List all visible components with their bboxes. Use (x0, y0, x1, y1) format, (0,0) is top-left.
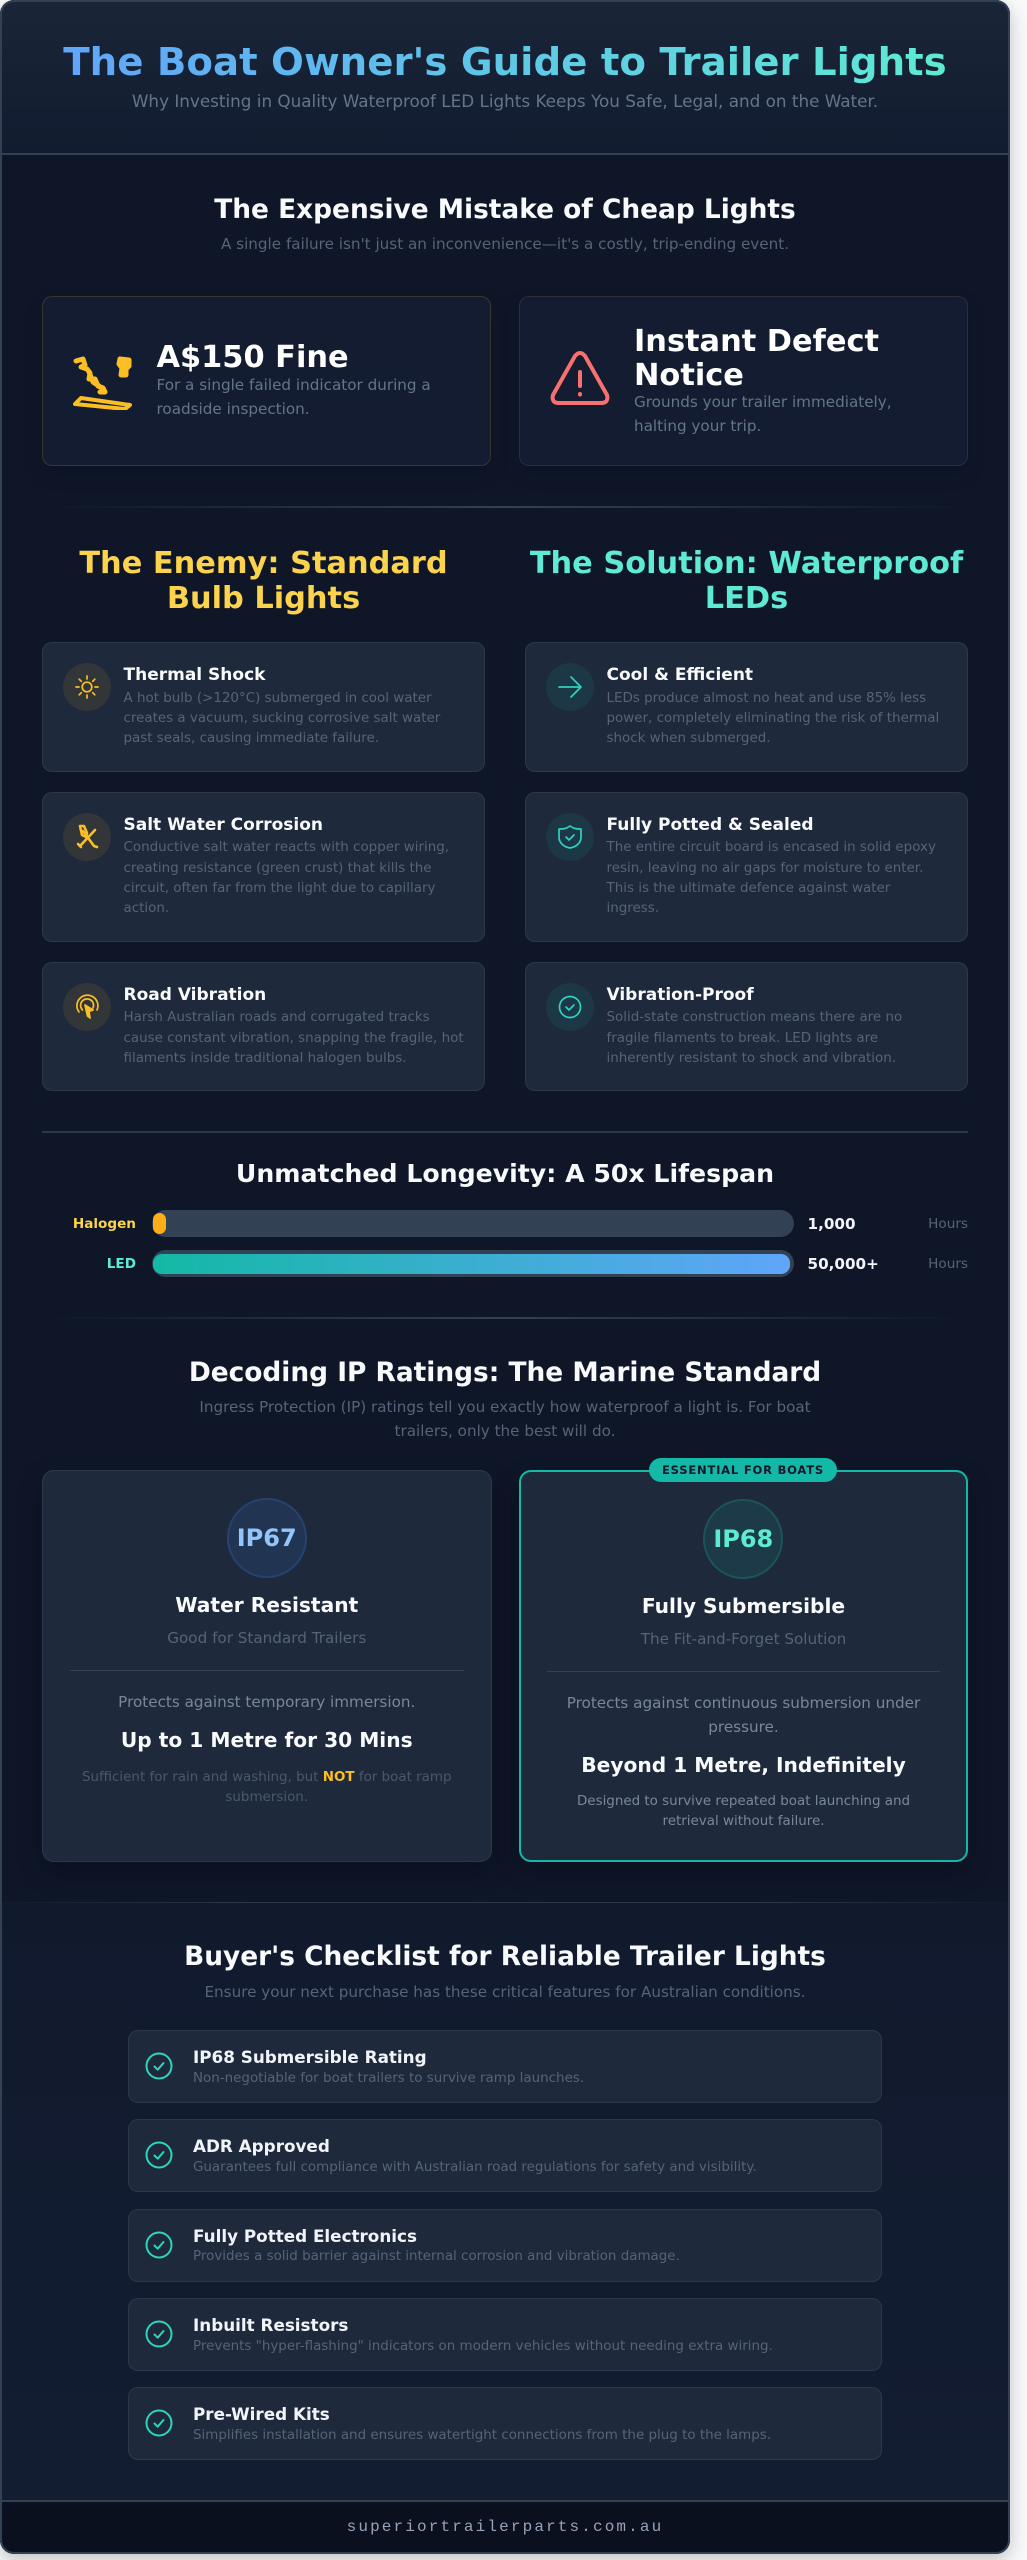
text: filaments inside traditional halogen bulbs. (124, 1051, 407, 1066)
item title: ADR Approved (193, 2136, 330, 2156)
header band (0, 0, 1010, 155)
LED bar (152, 1250, 794, 1277)
icon: check (146, 2410, 172, 2436)
heading: IP ratings: Decoding IP Ratings: The Marine Standard (189, 1357, 821, 1388)
text: resin, leaving no air gaps for moisture to enter. (606, 861, 923, 876)
note (82, 1770, 452, 1805)
icon: check (146, 2142, 172, 2168)
text: cause constant vibration, snapping the fragile, hot (124, 1031, 464, 1046)
icon: sun (63, 663, 111, 711)
text (606, 1010, 902, 1066)
panel: IP67 (42, 1470, 492, 1862)
note: Designed to survive repeated boat launching and (577, 1794, 910, 1809)
icon: check circle (546, 983, 594, 1031)
footer: superiortrailerparts.com.au (347, 2518, 663, 2536)
title: Vibration-Proof (606, 985, 754, 1005)
panel: defect notice (519, 296, 968, 466)
title: Cool & Efficient (606, 665, 753, 685)
badge: IP68 (703, 1498, 783, 1578)
checklist item: IP68 (128, 2030, 882, 2103)
title: Road Vibration (124, 985, 266, 1005)
badge: IP68: IP68 (713, 1524, 773, 1552)
heading: enemy: The Enemy: Standard (79, 546, 448, 581)
item text: Provides a solid barrier against internal corrosion and vibration damage. (193, 2249, 680, 2264)
icon: arrow (546, 663, 594, 711)
LED value: 50,000+ (808, 1255, 879, 1273)
notice figure: Notice (634, 358, 744, 393)
subheading: IP ratings: Ingress Protection (IP) ratings tell you exactly how waterproof a light is. For boat (199, 1398, 811, 1416)
notice description (634, 393, 892, 435)
item text: Prevents "hyper-flashing" indicators on modern vehicles without needing extra wiring. (193, 2339, 773, 2354)
icon: signal cursor (63, 983, 111, 1031)
description: Protects against temporary immersion. (118, 1693, 415, 1711)
text: creates a vacuum, sucking corrosive salt water (124, 711, 440, 726)
text (124, 1010, 464, 1066)
halogen value: 1,000 (808, 1215, 856, 1233)
text: action. (124, 901, 169, 916)
fine description (156, 376, 431, 418)
heading: enemy (79, 546, 448, 616)
text: Conductive salt water reacts with copper wiring, (124, 840, 449, 855)
heading: solution: LEDs (705, 580, 788, 616)
title: Thermal Shock (124, 665, 265, 685)
title: Water Resistant (175, 1593, 358, 1617)
depth rating: Up to 1 Metre for 30 Mins (121, 1728, 413, 1752)
icon: tools (63, 813, 111, 861)
halogen bar (152, 1210, 794, 1237)
icon: check (146, 2320, 172, 2348)
checklist item: potted electronics (128, 2209, 882, 2282)
ribbon: essential (649, 1458, 837, 1482)
description (567, 1694, 920, 1736)
bar chart: lifespan (73, 1210, 968, 1277)
checklist item: pre-wired (128, 2387, 882, 2460)
text: Solid-state construction means there are no (606, 1010, 902, 1025)
text: fragile filaments to break. LED lights are (606, 1031, 878, 1046)
text: inherently resistant to shock and vibration. (606, 1051, 896, 1066)
panel: salt water corrosion (42, 792, 485, 942)
description: pressure. (708, 1718, 779, 1736)
halogen unit: Hours (928, 1216, 968, 1232)
notice description: halting your trip. (634, 417, 761, 435)
text: Harsh Australian roads and corrugated tracks (124, 1010, 430, 1025)
subtitle: Good for Standard Trailers (167, 1629, 366, 1647)
text: This is the ultimate defence against water (606, 881, 890, 896)
text: ingress. (606, 901, 659, 916)
notice figure (634, 324, 879, 393)
panel: road vibration (42, 962, 485, 1091)
text (124, 691, 440, 746)
heading: solution: The Solution: Waterproof (530, 546, 963, 581)
LED label: LED (107, 1256, 136, 1272)
title: Fully Submersible (642, 1594, 845, 1618)
subheading: expensive mistake: A single failure isn't just an inconvenience—it's a costly, trip-ending event. (221, 235, 789, 253)
title: Salt Water Corrosion (124, 815, 323, 835)
description: Protects against continuous submersion under (567, 1694, 920, 1712)
item text: Guarantees full compliance with Australian road regulations for safety and visibility. (193, 2160, 757, 2175)
subtitle: Why Investing in Quality Waterproof LED Lights Keeps You Safe, Legal, and on the Water. (132, 91, 878, 111)
heading: longevity: Unmatched Longevity: A 50x Lifespan (236, 1159, 774, 1188)
panel: fully potted (525, 792, 968, 942)
panel: cool and efficient (525, 642, 968, 772)
item text: Non-negotiable for boat trailers to survive ramp launches. (193, 2071, 584, 2086)
panel: vibration proof (525, 962, 968, 1091)
note: retrieval without failure. (662, 1814, 824, 1829)
footer (0, 2500, 1010, 2554)
text: creating resistance (green crust) that kills the (124, 861, 432, 876)
item text: Simplifies installation and ensures watertight connections from the plug to the lamps. (193, 2428, 771, 2443)
text: shock when submerged. (606, 731, 771, 746)
subheading: IP ratings (199, 1398, 811, 1440)
fine description: For a single failed indicator during a (156, 376, 431, 394)
text (124, 840, 449, 916)
icon: warning triangle (550, 351, 610, 405)
text (606, 691, 939, 746)
halogen label: Halogen (73, 1216, 136, 1232)
heading: checklist: Buyer's Checklist for Reliable Trailer Lights (184, 1941, 826, 1972)
text: circuit, often far from the light due to capillary (124, 881, 435, 896)
heading: solution (530, 546, 964, 616)
LED unit: Hours (928, 1256, 968, 1272)
badge: IP67: IP67 (237, 1524, 297, 1552)
heading: expensive mistake: The Expensive Mistake of Cheap Lights (214, 194, 796, 225)
item title: Fully Potted Electronics (193, 2226, 417, 2246)
notice figure: Instant Defect (634, 324, 879, 359)
panel: IP68 (519, 1470, 968, 1862)
icon: shield check (546, 813, 594, 861)
note (577, 1794, 910, 1829)
ribbon: essential: ESSENTIAL FOR BOATS (662, 1463, 824, 1477)
item title: IP68 Submersible Rating (193, 2047, 427, 2067)
depth rating: Beyond 1 Metre, Indefinitely (581, 1753, 906, 1777)
icon: check (146, 2232, 172, 2258)
subtitle: The Fit-and-Forget Solution (641, 1630, 846, 1648)
text: LEDs produce almost no heat and use 85% less (606, 691, 926, 706)
fine figure: A$150 Fine (156, 340, 349, 375)
title: The Boat Owner's Guide to Trailer Lights (63, 40, 947, 85)
item title: Inbuilt Resistors (193, 2315, 348, 2335)
note: Sufficient for rain and washing, but NOT for boat ramp (82, 1770, 452, 1784)
subheading: checklist: Ensure your next purchase has these critical features for Australian conditions. (204, 1983, 806, 2001)
text: A hot bulb (>120°C) submerged in cool water (124, 691, 432, 706)
panel: thermal shock (42, 642, 485, 772)
heading: enemy: Bulb Lights (167, 580, 360, 616)
fine description: roadside inspection. (156, 400, 310, 418)
subheading: IP ratings: trailers, only the best will do. (395, 1422, 615, 1440)
title: Fully Potted & Sealed (606, 815, 814, 835)
icon: broken tools (73, 356, 132, 410)
icon: check (146, 2052, 172, 2080)
text: The entire circuit board is encased in solid epoxy (606, 840, 936, 855)
checklist item: ADR (128, 2119, 882, 2192)
item title: Pre-Wired Kits (193, 2404, 330, 2424)
text (606, 840, 936, 916)
text: power, completely eliminating the risk of thermal (606, 711, 939, 726)
text: past seals, causing immediate failure. (124, 731, 379, 746)
note: submersion. (225, 1790, 308, 1805)
checklist item: resistors (128, 2298, 882, 2371)
notice description: Grounds your trailer immediately, (634, 393, 892, 411)
bottom section background (0, 1902, 1010, 2502)
badge: IP67 (227, 1498, 307, 1578)
panel: fine (42, 296, 491, 466)
